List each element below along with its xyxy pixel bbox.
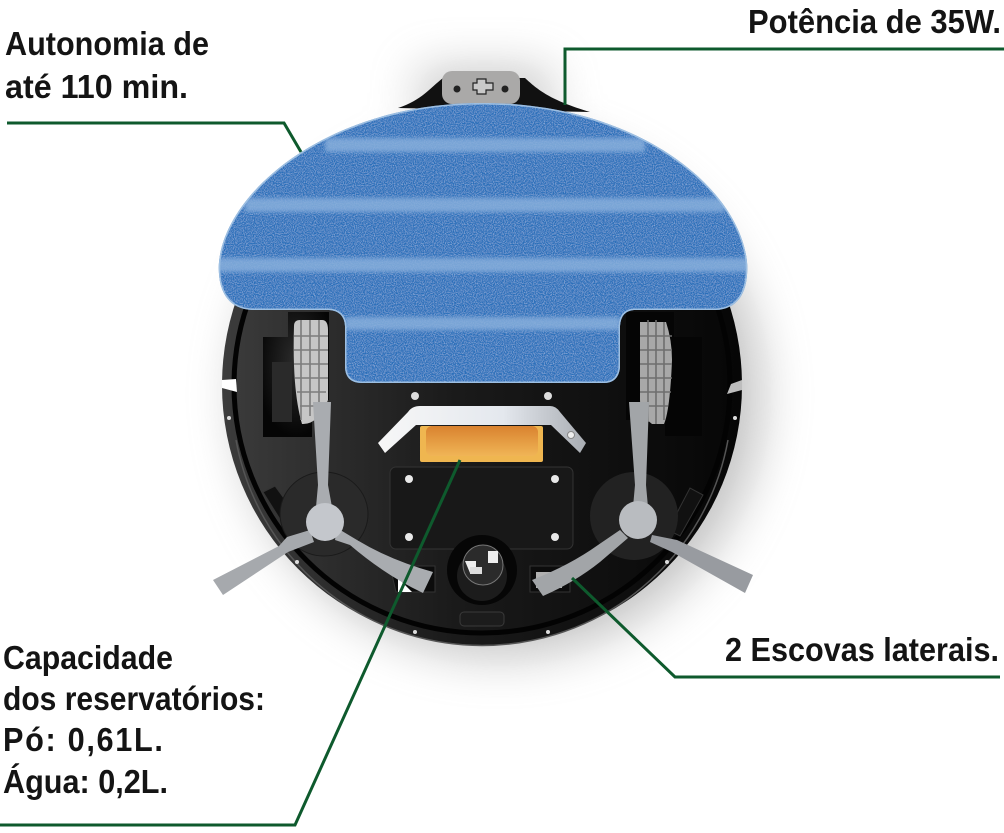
label: reservoir capacity	[3, 639, 265, 800]
charging contact slots	[390, 566, 570, 592]
orange water tank window	[420, 426, 543, 462]
label: reservoir capacity: Pó: 0,61L.	[3, 721, 163, 758]
leader line: reservoirs	[0, 460, 460, 825]
label: autonomy	[5, 25, 209, 105]
rear bumper and tab	[398, 71, 590, 112]
screws on rim	[227, 416, 737, 634]
leader line: side brushes	[572, 578, 1000, 677]
label: reservoir capacity: Capacidade	[3, 639, 173, 676]
robot body	[222, 125, 742, 645]
pad stripes	[215, 103, 750, 383]
left wheel	[263, 312, 329, 437]
robot vacuum	[222, 71, 742, 645]
leader line: power	[565, 49, 1004, 105]
side notches	[222, 379, 237, 392]
label: reservoir capacity: dos reservatórios:	[3, 680, 265, 717]
screws near handle	[411, 392, 552, 400]
front caster wheel	[447, 535, 517, 605]
mop pad	[215, 103, 750, 383]
label: autonomy: Autonomia de	[5, 25, 209, 62]
brush wells	[280, 472, 678, 560]
label: autonomy: até 110 min.	[5, 68, 188, 105]
right wheel	[626, 312, 702, 436]
side clips	[263, 486, 703, 536]
right side brush	[532, 402, 753, 596]
central panel	[390, 467, 573, 549]
front clip	[460, 612, 504, 626]
leader line: autonomy	[7, 123, 301, 152]
left side brush	[213, 402, 433, 595]
robot shadow	[238, 70, 762, 657]
silver handle bar	[378, 406, 586, 453]
label: reservoir capacity: Água: 0,2L.	[3, 763, 168, 800]
